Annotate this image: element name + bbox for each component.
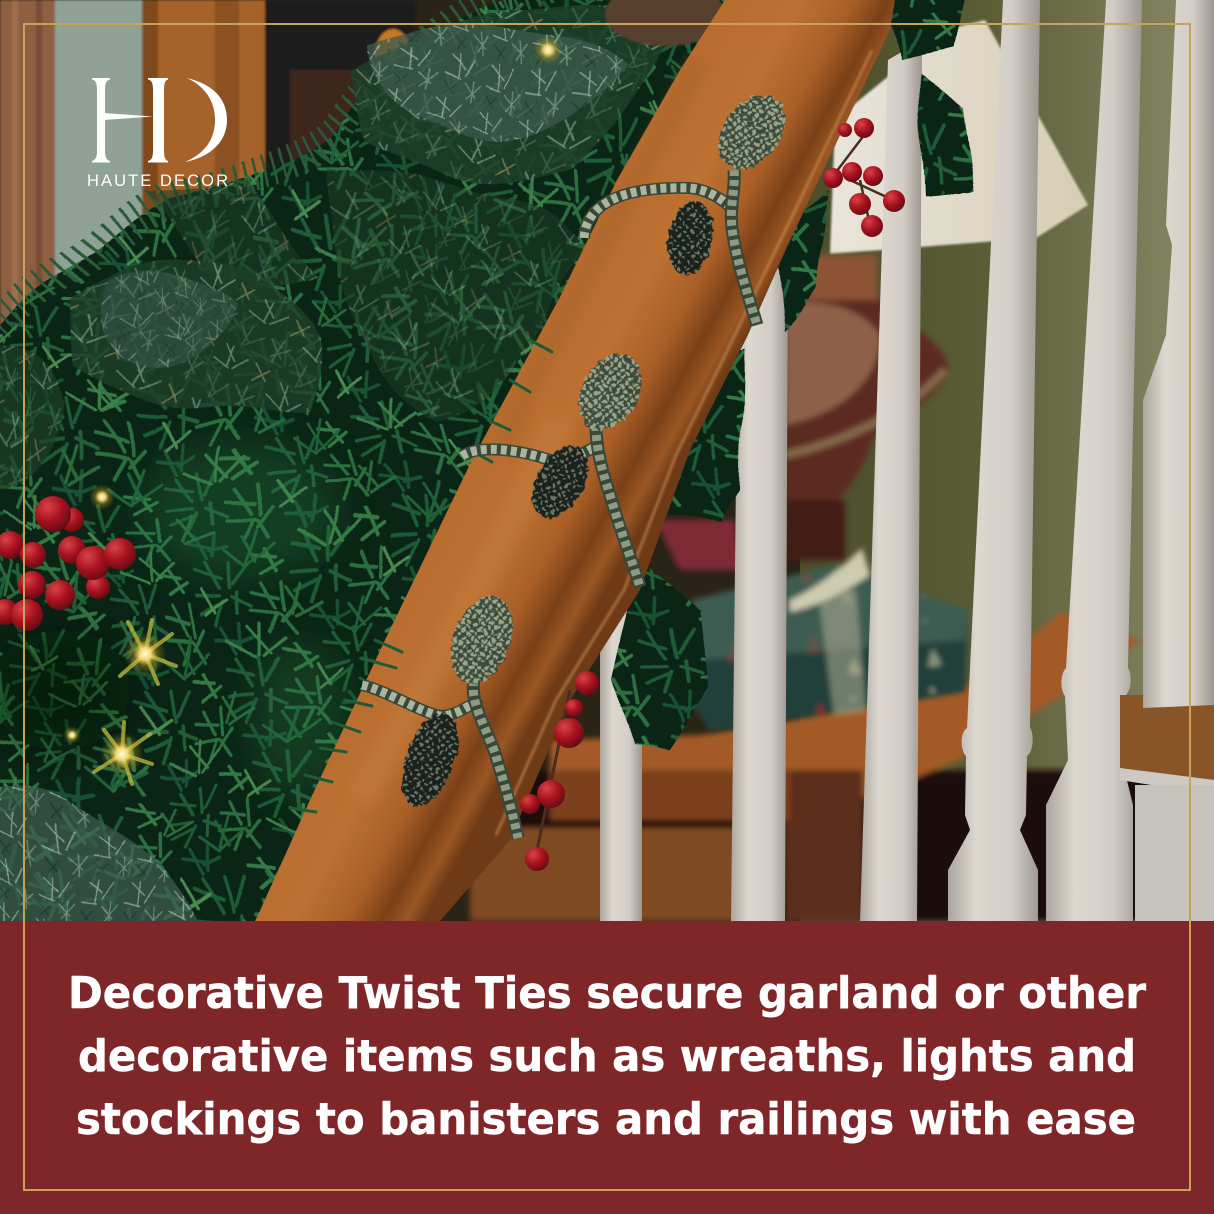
gift box — [655, 520, 968, 732]
logo wordmark: HAUTE DECOR — [87, 172, 228, 190]
frosted sprigs, top centre — [350, 8, 670, 182]
garland lights — [63, 35, 563, 784]
baluster 2 — [731, 260, 788, 921]
twist tie: bottom — [362, 588, 524, 838]
caption line 2: decorative items such as wreaths, lights and — [78, 1031, 1136, 1082]
baluster 5 turned — [1046, 0, 1142, 921]
background: blurred room left — [0, 0, 415, 370]
baluster 6 newel — [1143, 0, 1214, 708]
baluster 1 — [600, 585, 642, 921]
far tread — [1120, 695, 1214, 780]
baluster 3 — [860, 40, 922, 921]
shadow and highlight tones in garland — [0, 440, 350, 800]
logo monogram HD — [92, 78, 227, 162]
red berries bottom — [520, 671, 599, 871]
main garland — [0, 0, 760, 950]
wooden handrail — [255, 0, 895, 921]
lamp vase — [785, 255, 948, 560]
twist tie: top — [584, 82, 799, 325]
lower newel panel — [1135, 785, 1214, 921]
lamp shade — [830, 20, 1088, 254]
caption line 1: Decorative Twist Ties secure garland or other — [68, 968, 1146, 1019]
garland needles overlapping rail edge — [290, 340, 552, 812]
red berries top right — [823, 118, 905, 237]
background wall — [800, 0, 1214, 921]
side table — [470, 612, 1150, 921]
caption text — [68, 968, 1146, 1145]
garland behind rail right side — [610, 0, 975, 750]
tread lip — [1120, 768, 1214, 795]
photo: staircase with garland — [0, 0, 1214, 950]
balusters — [600, 0, 1214, 921]
baluster 4 turned — [948, 0, 1040, 921]
red berries left — [0, 496, 136, 631]
caption line 3: stockings to banisters and railings with ease — [76, 1094, 1136, 1145]
twist tie: middle — [462, 343, 654, 587]
caption band — [0, 921, 1214, 1214]
logo: Haute Decor — [87, 78, 228, 190]
pine cone behind rail top — [605, 0, 725, 46]
base backdrop — [0, 0, 1214, 921]
mid sprigs — [330, 170, 590, 420]
